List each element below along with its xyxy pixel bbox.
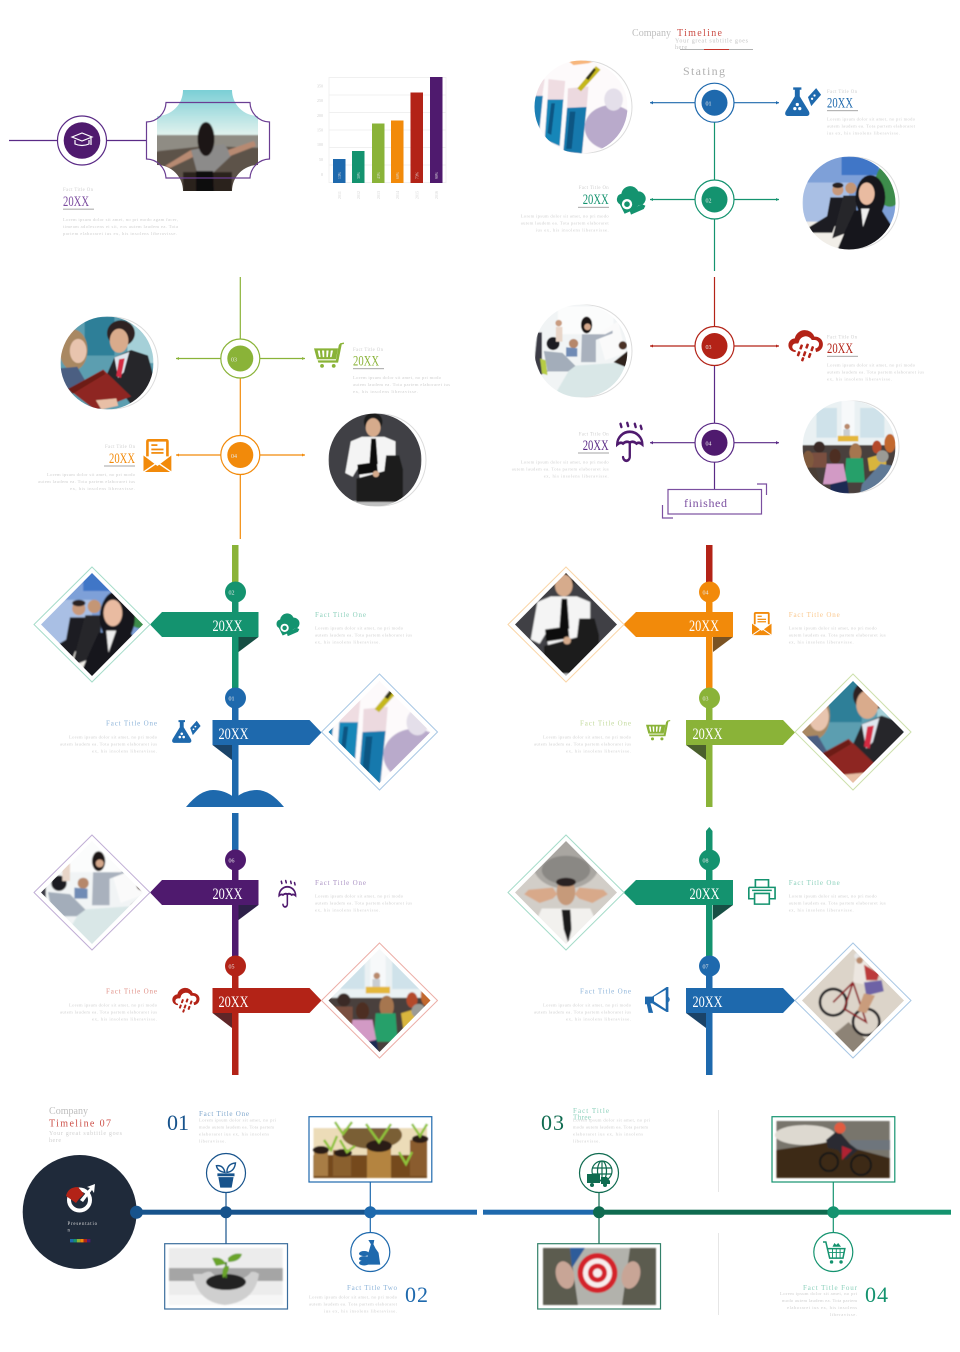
milestone 01 bbox=[165, 1110, 288, 1309]
milestone 04: elaboraret ius ex, his insolens bbox=[787, 1305, 857, 1311]
milestone 03: elaboraret ius ex, his insolens bbox=[573, 1132, 643, 1138]
milestone 01: modo autem laudem ea. Tota partem bbox=[199, 1124, 274, 1130]
fact text: Fact Title One bbox=[789, 879, 840, 887]
milestone 02: autem laudem ea. Tota partem elaboraret bbox=[309, 1302, 398, 1306]
bar chart: 43% bbox=[377, 171, 381, 179]
fact text: Lorem ipsum dolor sit amet, no pri modo bbox=[69, 1002, 158, 1008]
title bbox=[632, 28, 753, 51]
bar chart: 50 bbox=[319, 157, 323, 162]
photo: call center bbox=[802, 156, 905, 253]
node 03: 03 bbox=[706, 345, 712, 351]
bar chart: 2015 bbox=[414, 191, 420, 199]
fact 04: Fact Title On bbox=[579, 432, 609, 438]
flag 03 bbox=[686, 720, 795, 760]
flag 08: 20XX bbox=[690, 886, 720, 903]
icon: cloud gear bbox=[617, 186, 646, 215]
icon: umbrella bbox=[617, 423, 642, 461]
node 04: 04 bbox=[706, 442, 712, 448]
photo diamond: call center bbox=[34, 567, 158, 683]
fact text: Lorem ipsum dolor sit amet, no pri modo bbox=[315, 626, 404, 632]
bar chart: 150 bbox=[317, 128, 323, 132]
icon: flask bbox=[172, 720, 201, 743]
milestone 02 bbox=[309, 1117, 432, 1314]
fact text: Lorem ipsum dolor sit amet, no pri modo bbox=[69, 734, 158, 740]
flag 08 bbox=[624, 880, 733, 920]
fact 02: Fact Title On bbox=[579, 186, 609, 191]
photo diamond: audience bbox=[322, 943, 438, 1058]
spine bottom bbox=[714, 365, 716, 489]
spine bbox=[232, 813, 238, 1075]
milestone 04 bbox=[772, 1117, 895, 1317]
fact 04 bbox=[512, 432, 609, 480]
fact 01: autem laudem ea. Tota partem elaboraret bbox=[827, 124, 916, 128]
bar chart bbox=[317, 77, 446, 199]
flag 04: 20XX bbox=[689, 618, 719, 635]
icon: flask bbox=[785, 87, 821, 116]
milestone 03: Three bbox=[573, 1114, 591, 1122]
fact text: Lorem ipsum dolor sit amet, no pri modo bbox=[789, 626, 877, 632]
fact text bbox=[315, 611, 412, 646]
fact text: Fact Title One bbox=[315, 879, 366, 887]
photo: meeting bbox=[534, 304, 632, 398]
node 01 bbox=[650, 83, 779, 122]
hero frame bbox=[146, 102, 270, 178]
fact text: autem laudem ea. Tota partem elaboraret ius bbox=[789, 632, 886, 638]
fact text: autem laudem ea. Tota partem elaboraret ius bbox=[60, 1010, 157, 1014]
milestone 01: Fact Title One bbox=[199, 1110, 249, 1118]
fact text: ex, his insolens liberavisse. bbox=[789, 908, 854, 914]
photo: audience bbox=[801, 400, 899, 494]
icon: cart bbox=[314, 342, 344, 368]
flag 05 bbox=[212, 988, 322, 1028]
icon: megaphone bbox=[645, 987, 670, 1013]
marker 03: 03 bbox=[702, 696, 708, 702]
icon: printer bbox=[749, 880, 775, 904]
milestone 02: ius ex, his insolens liberavisse. bbox=[324, 1308, 397, 1314]
fact text: autem laudem ea. Tota partem elaboraret ius bbox=[315, 632, 412, 638]
fact 04: 20XX bbox=[109, 451, 135, 467]
icon: cloud gear bbox=[277, 613, 300, 636]
bottom title bbox=[49, 1106, 123, 1144]
bar chart: 2011 bbox=[337, 191, 342, 199]
icon: graduation cap bbox=[58, 116, 106, 165]
photo: man with tablet bbox=[328, 413, 426, 506]
photo diamond: lab bbox=[321, 674, 445, 790]
milestone 03: liberavisse. bbox=[573, 1138, 600, 1144]
fact 04 bbox=[38, 445, 136, 492]
flag 02: 20XX bbox=[212, 618, 242, 635]
spine bottom bbox=[239, 377, 241, 539]
milestone 03: 03 bbox=[541, 1110, 564, 1135]
marker 04 bbox=[699, 582, 720, 602]
fact 01: 20XX bbox=[827, 96, 853, 112]
fact text: autem laudem ea. Tota partem elaboraret ius bbox=[789, 900, 886, 906]
bar chart: 2014 bbox=[395, 191, 400, 199]
finished box: finished bbox=[684, 496, 727, 510]
bottom title: Company bbox=[49, 1106, 88, 1117]
photo: lab tubes bbox=[532, 59, 637, 154]
photo diamond: biker bbox=[795, 943, 911, 1058]
bar chart: 0 bbox=[321, 172, 323, 177]
fact text: Fact Title One bbox=[315, 611, 366, 619]
milestone 03: Fact Title bbox=[573, 1107, 609, 1115]
fact text bbox=[315, 879, 412, 914]
fact text: 20XX bbox=[63, 194, 89, 210]
bar chart: 2013 bbox=[376, 191, 381, 199]
node 03 bbox=[176, 339, 305, 378]
node 03: 03 bbox=[231, 358, 237, 364]
panel: flags 01-02 bbox=[34, 545, 445, 807]
fact text: Lorem ipsum dolor sit amet, no pri modo bbox=[315, 894, 404, 900]
fact 02: Lorem ipsum dolor sit amet, no pri modo bbox=[521, 214, 609, 220]
node 04 bbox=[650, 423, 779, 462]
panel: vertical timeline 03-04 right bbox=[512, 277, 924, 518]
node 04 bbox=[176, 436, 305, 474]
bar chart: 2016 bbox=[434, 191, 439, 199]
panel: flags 05-06 bbox=[34, 813, 438, 1075]
flag 06 bbox=[150, 880, 258, 920]
fact text: partem elaboraret ius ex, his insolens liberavisse. bbox=[63, 231, 177, 237]
fact text: autem laudem ea. Tota partem elaboraret ius bbox=[60, 742, 157, 746]
bar chart: 200 bbox=[317, 113, 323, 118]
milestone 01: Lorem ipsum dolor sit amet, no pri bbox=[199, 1118, 277, 1124]
bar chart: 250 bbox=[317, 98, 323, 103]
spine bbox=[186, 545, 284, 807]
flag 05: 20XX bbox=[218, 994, 248, 1011]
marker 05 bbox=[225, 956, 246, 976]
milestone 03: modo autem laudem ea. Tota partem bbox=[573, 1124, 648, 1130]
fact text: Lorem ipsum dolor sit amet, no pri modo agam facer, bbox=[63, 217, 178, 223]
fact 04: autem laudem ea. Tota partem elaboraret ius bbox=[512, 466, 609, 472]
flag 03: 20XX bbox=[692, 726, 722, 743]
fact text bbox=[534, 720, 632, 754]
bottom title: Your great subtitle goes bbox=[49, 1131, 123, 1137]
marker 06: 06 bbox=[228, 858, 234, 864]
fact text bbox=[789, 879, 886, 914]
flag 02 bbox=[150, 612, 258, 652]
milestone 04: 04 bbox=[865, 1282, 888, 1307]
fact text: autem laudem ea. Tota partem elaboraret ius bbox=[315, 900, 412, 906]
fact 03: Lorem ipsum dolor sit amet, no pri modo bbox=[827, 362, 916, 368]
fact text bbox=[60, 988, 158, 1022]
flag 01 bbox=[212, 720, 322, 760]
fact text: Fact Title One bbox=[580, 720, 631, 728]
main line bbox=[136, 1210, 951, 1215]
marker 05: 05 bbox=[228, 964, 234, 970]
fact text bbox=[60, 720, 158, 754]
photo diamond: meeting bbox=[34, 835, 150, 950]
panel: vertical timeline 03-04 left bbox=[38, 277, 450, 539]
bar chart: 30% bbox=[357, 171, 361, 179]
fact 04: Fact Title On bbox=[105, 445, 136, 450]
icon: mail bbox=[752, 612, 772, 635]
fact 04: autem laudem ea. Tota partem elaboraret ius bbox=[38, 479, 135, 484]
fact 04: ex, his insolens liberavisse. bbox=[544, 474, 609, 480]
fact 03 bbox=[827, 336, 924, 382]
milestone 01: 01 bbox=[167, 1110, 189, 1135]
marker 06 bbox=[225, 850, 246, 870]
node 01: 01 bbox=[706, 102, 712, 108]
fact 04: Lorem ipsum dolor sit amet, no pri modo bbox=[521, 460, 609, 466]
flag 07 bbox=[686, 988, 795, 1028]
fact text: timeam adolescens ei sit, eos autem laudem ea. Tota bbox=[63, 224, 178, 230]
milestone 04: Lorem ipsum dolor sit amet, no pri bbox=[780, 1291, 858, 1297]
fact 02 bbox=[521, 186, 609, 234]
dark logo circle: n bbox=[68, 1228, 70, 1234]
fact text: Lorem ipsum dolor sit amet, no pri modo bbox=[543, 734, 632, 740]
flag 01: 20XX bbox=[218, 726, 248, 743]
fact 03: autem laudem ea. Tota partem elaboraret ius bbox=[353, 382, 450, 387]
spine top bbox=[714, 277, 716, 327]
flag 04 bbox=[624, 612, 733, 652]
fact text: Fact Title On bbox=[63, 188, 94, 193]
icon: rain cloud bbox=[788, 330, 823, 362]
bottom title: Timeline 07 bbox=[49, 1118, 111, 1130]
bar chart: 2012 bbox=[356, 191, 361, 199]
milestone 04: modo autem laudem ea. Tota partem bbox=[782, 1298, 857, 1303]
fact text: ex, his insolens liberavisse. bbox=[789, 640, 854, 646]
fact 03: Fact Title On bbox=[827, 336, 858, 340]
title: Timeline bbox=[677, 28, 723, 39]
milestone 01: liberavisse. bbox=[199, 1138, 226, 1144]
bar chart: 13% bbox=[338, 171, 342, 179]
milestone 01: elaboraret ius ex, his insolens bbox=[199, 1132, 269, 1138]
photo diamond: thinker bbox=[508, 835, 624, 950]
fact 03: autem laudem ea. Tota partem elaboraret ius bbox=[827, 370, 924, 374]
connector line bbox=[9, 140, 146, 142]
marker 02: 02 bbox=[228, 590, 234, 596]
bottom title: here bbox=[49, 1138, 61, 1144]
fact 04: ex, his insolens liberavisse. bbox=[70, 486, 135, 492]
spine bbox=[714, 122, 716, 271]
fact 01: Fact Title On bbox=[827, 90, 858, 95]
milestone 02: Fact Title Two bbox=[347, 1284, 398, 1292]
marker 01 bbox=[225, 688, 246, 708]
fact text: autem laudem ea. Tota partem elaboraret ius bbox=[534, 742, 631, 746]
marker 02 bbox=[225, 582, 246, 602]
heading: stating: Stating bbox=[683, 64, 725, 78]
finished box bbox=[662, 484, 766, 518]
spine top bbox=[239, 277, 241, 339]
panel: flags 07-08 bbox=[508, 827, 911, 1075]
fact text: ex, his insolens liberavisse. bbox=[566, 1016, 631, 1022]
title: here bbox=[675, 45, 687, 51]
photo diamond: man bbox=[508, 567, 624, 682]
fact text: Fact Title One bbox=[789, 611, 840, 619]
panel: horizontal timeline bbox=[23, 1106, 951, 1317]
icon: mail bbox=[144, 439, 171, 472]
photo diamond: couple bbox=[795, 674, 911, 790]
node 02 bbox=[650, 180, 779, 219]
spine bbox=[706, 545, 712, 807]
fact text bbox=[534, 988, 632, 1022]
marker 01: 01 bbox=[228, 696, 234, 702]
node 02: 02 bbox=[706, 198, 712, 204]
fact text: Lorem ipsum dolor sit amet, no pri modo bbox=[789, 894, 877, 900]
panel: fact with hero photo bbox=[9, 85, 270, 237]
node 04: 04 bbox=[231, 454, 237, 460]
fact text: Fact Title One bbox=[106, 988, 157, 996]
fact 03: Lorem ipsum dolor sit amet, no pri modo bbox=[353, 375, 442, 381]
title: Your great subtitle goes bbox=[675, 38, 749, 44]
fact text: Lorem ipsum dolor sit amet, no pri modo bbox=[543, 1002, 632, 1008]
title: Company bbox=[632, 28, 671, 39]
fact 03: 20XX bbox=[353, 354, 379, 370]
marker 08: 08 bbox=[702, 858, 708, 864]
marker 04: 04 bbox=[702, 590, 708, 596]
fact text bbox=[789, 611, 886, 646]
fact text: ex, his insolens liberavisse. bbox=[92, 748, 157, 754]
bar chart: 90% bbox=[435, 171, 439, 179]
fact text: autem laudem ea. Tota partem elaboraret ius bbox=[534, 1010, 631, 1014]
flag 06: 20XX bbox=[212, 886, 242, 903]
fact 03: ex, his insolens liberavisse. bbox=[827, 376, 892, 382]
fact 02: autem laudem ea. Tota partem elaboraret bbox=[521, 220, 609, 226]
fact 02: ius ex, his insolens liberavisse. bbox=[536, 228, 609, 234]
fact 01: Lorem ipsum dolor sit amet, no pri modo bbox=[827, 116, 916, 122]
fact 03 bbox=[353, 348, 450, 395]
marker 03 bbox=[699, 688, 720, 708]
milestone 04: Fact Title Four bbox=[803, 1284, 858, 1292]
hero photo bbox=[157, 90, 258, 191]
milestone 03: Lorem ipsum dolor sit amet, no pri bbox=[573, 1118, 651, 1124]
milestone 04: liberavisse. bbox=[830, 1312, 857, 1317]
bar chart: 60% bbox=[396, 171, 400, 179]
marker 07: 07 bbox=[702, 964, 708, 970]
milestone 02: 02 bbox=[405, 1282, 428, 1307]
spine bbox=[706, 827, 712, 1075]
bar chart: 100 bbox=[317, 142, 323, 147]
line dot bbox=[130, 1206, 143, 1219]
icon: cart bbox=[646, 720, 670, 740]
flag 07: 20XX bbox=[692, 994, 722, 1011]
fact 04: 20XX bbox=[583, 438, 609, 454]
fact text: ex, his insolens liberavisse. bbox=[566, 748, 631, 754]
dark logo circle: Presentatio bbox=[68, 1222, 98, 1227]
bar chart: 73% bbox=[416, 171, 420, 179]
panel: vertical timeline 01-02 bbox=[521, 59, 916, 271]
fact text: Fact Title One bbox=[106, 720, 157, 728]
fact 02: 20XX bbox=[583, 192, 609, 208]
marker 08 bbox=[699, 850, 720, 870]
milestone 03 bbox=[538, 1107, 660, 1309]
panel: flags 03-04 bbox=[508, 545, 911, 807]
marker 07 bbox=[699, 956, 720, 976]
fact text bbox=[63, 188, 178, 237]
bar chart: 350 bbox=[317, 84, 323, 88]
photo: couple bbox=[58, 316, 158, 410]
fact text: Fact Title One bbox=[580, 988, 631, 996]
fact 01 bbox=[827, 90, 916, 136]
milestone 02: Lorem ipsum dolor sit amet, no pri modo bbox=[309, 1294, 398, 1300]
fact 03: Fact Title On bbox=[353, 348, 384, 353]
fact text: ex, his insolens liberavisse. bbox=[315, 908, 380, 914]
fact 03: 20XX bbox=[827, 341, 853, 357]
fact 01: ius ex, his insolens liberavisse. bbox=[827, 130, 900, 136]
dark logo circle bbox=[23, 1155, 137, 1269]
node 03 bbox=[650, 326, 779, 366]
icon: rain cloud bbox=[172, 988, 200, 1013]
icon: umbrella bbox=[279, 881, 296, 907]
fact text: ex, his insolens liberavisse. bbox=[92, 1016, 157, 1022]
fact 04: Lorem ipsum dolor sit amet, no pri modo bbox=[47, 472, 136, 478]
fact text: ex, his insolens liberavisse. bbox=[315, 640, 380, 646]
fact 03: ex, his insolens liberavisse. bbox=[353, 389, 418, 395]
